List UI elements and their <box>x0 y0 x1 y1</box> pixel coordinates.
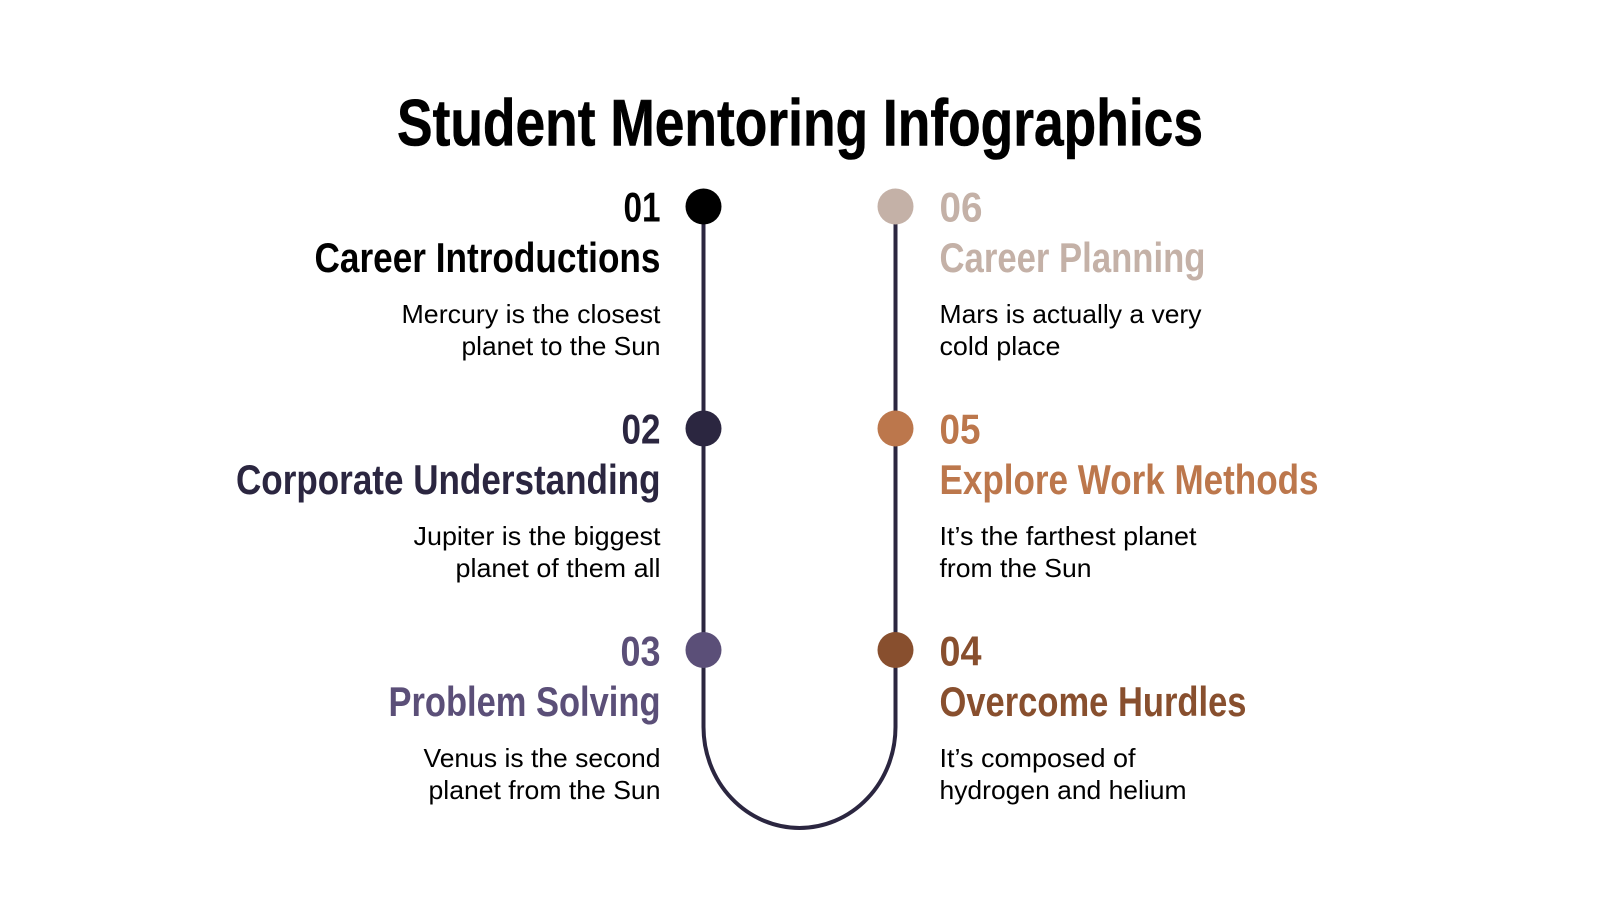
description 01 <box>402 299 661 361</box>
step 02: corporate understanding <box>236 406 722 583</box>
heading 03: Problem Solving <box>388 678 660 725</box>
heading 04: Overcome Hurdles <box>940 678 1246 725</box>
description 06 <box>940 299 1202 361</box>
marker 04 <box>878 632 914 668</box>
description 02: planet of them all <box>456 553 660 583</box>
heading 05: Explore Work Methods <box>940 456 1318 503</box>
description 02: Jupiter is the biggest <box>414 521 661 551</box>
step 04: overcome hurdles <box>878 628 1246 805</box>
marker 05 <box>878 410 914 446</box>
description 01: planet to the Sun <box>462 331 660 361</box>
number 04: 04 <box>940 628 982 674</box>
description 05: It’s the farthest planet <box>940 521 1197 551</box>
number 03: 03 <box>620 628 660 674</box>
marker 03 <box>686 632 722 668</box>
step 05: explore work methods <box>878 406 1318 583</box>
description 03: Venus is the second <box>424 743 660 773</box>
step 03: problem solving <box>388 628 722 805</box>
marker 06 <box>878 188 914 224</box>
description 04 <box>940 743 1186 805</box>
description 05: from the Sun <box>940 553 1092 583</box>
description 06: cold place <box>940 331 1060 361</box>
number 06: 06 <box>940 184 982 230</box>
heading 02: Corporate Understanding <box>236 456 660 503</box>
description 05 <box>940 521 1197 583</box>
description 03: planet from the Sun <box>428 775 660 805</box>
description 02 <box>414 521 661 583</box>
number 01: 01 <box>624 184 660 230</box>
marker 01 <box>686 188 722 224</box>
connector line: U-shaped path <box>704 206 896 828</box>
title: Student Mentoring Infographics <box>397 86 1203 160</box>
description 06: Mars is actually a very <box>940 299 1202 329</box>
description 03 <box>424 743 660 805</box>
heading 06: Career Planning <box>940 234 1206 281</box>
description 04: hydrogen and helium <box>940 775 1186 805</box>
number 05: 05 <box>940 406 980 452</box>
step 01: career introductions <box>314 184 722 361</box>
step 06: career planning <box>878 184 1206 361</box>
description 04: It’s composed of <box>940 743 1136 773</box>
heading 01: Career Introductions <box>314 234 660 281</box>
description 01: Mercury is the closest <box>402 299 661 329</box>
marker 02 <box>686 410 722 446</box>
number 02: 02 <box>622 406 660 452</box>
